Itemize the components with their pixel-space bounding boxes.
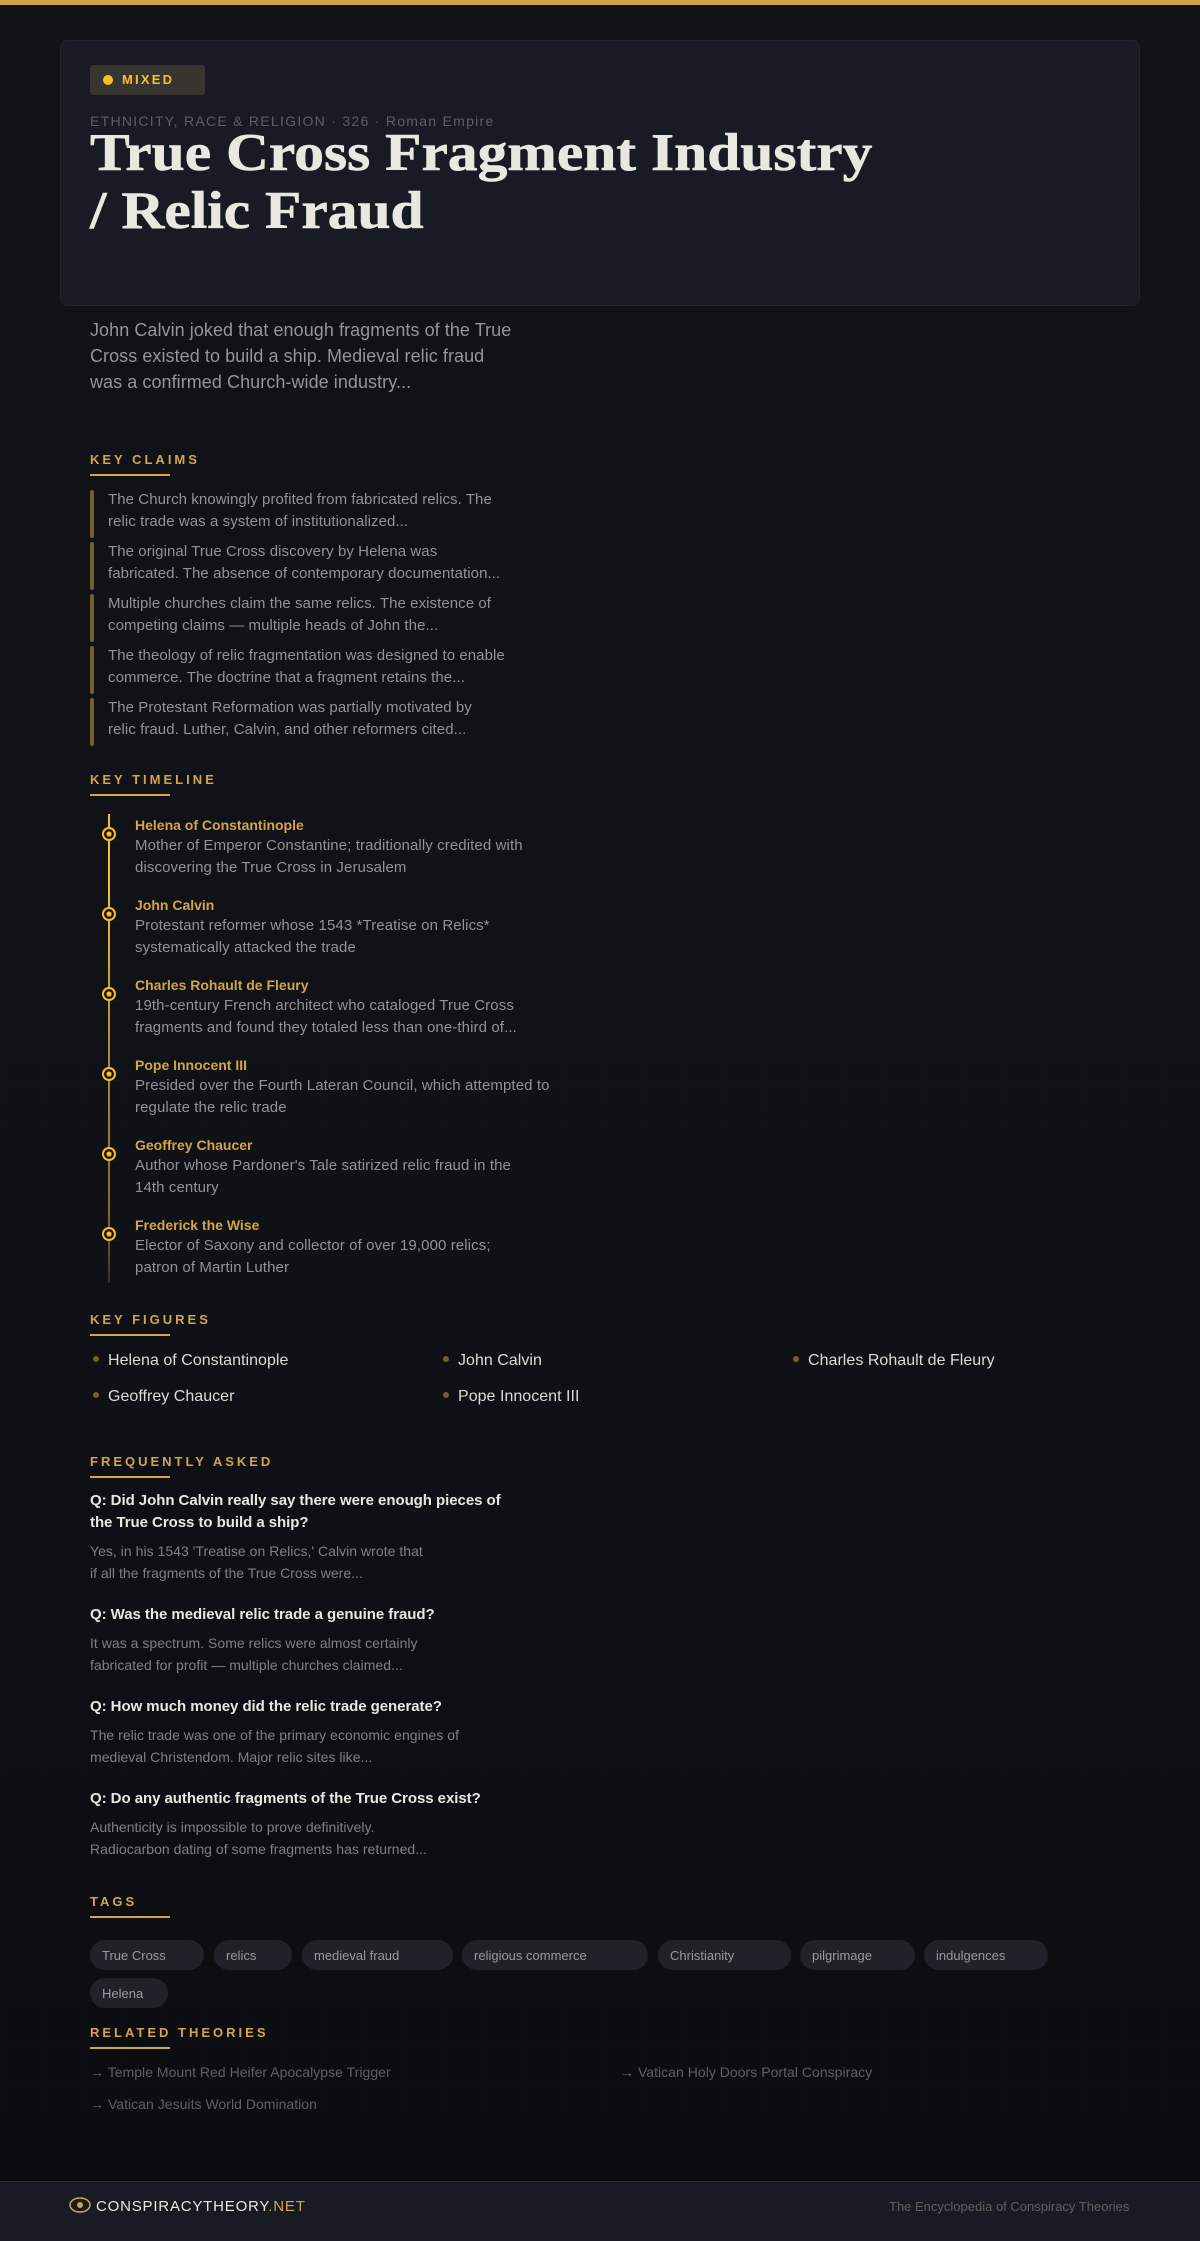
FAQ item 1: Yes, in his 1543 'Treatise on Relics,' Calvin wrote that — [90, 1543, 423, 1559]
intro paragraph: John Calvin joked that enough fragments of the True — [90, 320, 511, 340]
FAQ item 4: Authenticity is impossible to prove definitively. — [90, 1819, 374, 1835]
panel: hero header — [60, 40, 1140, 306]
related link 3: → Vatican Jesuits World Domination — [90, 2096, 317, 2112]
timeline item: Geoffrey Chaucer: Author whose Pardoner's Tale satirized relic fraud in the — [135, 1157, 511, 1174]
timeline item: Geoffrey Chaucer: 14th century — [135, 1179, 219, 1196]
tag: religious commerce — [462, 1940, 648, 1970]
timeline item: Helena of Constantinople — [102, 817, 523, 876]
FAQ item 4: Radiocarbon dating of some fragments has returned... — [90, 1841, 427, 1857]
tag: medieval fraud: medieval fraud — [314, 1948, 399, 1963]
badge: mixed verdict — [90, 65, 205, 95]
claim 1 — [90, 490, 492, 538]
claim 1: The Church knowingly profited from fabricated relics. The — [108, 491, 492, 508]
heading: key timeline: KEY TIMELINE — [90, 772, 217, 787]
icon: badge dot — [103, 75, 113, 85]
claim 3 — [90, 594, 491, 642]
FAQ item 1 — [90, 1492, 501, 1581]
timeline item: Helena of Constantinople: Helena of Constantinople — [135, 817, 304, 833]
FAQ item 2 — [90, 1606, 435, 1673]
title — [89, 124, 872, 240]
timeline item: Pope Innocent III: Presided over the Fourth Lateran Council, which attempted to — [135, 1077, 550, 1094]
icon: eye logo — [69, 2197, 91, 2213]
FAQ item 4 — [90, 1790, 481, 1857]
title: / Relic Fraud — [90, 182, 424, 240]
FAQ item 2: Q: Was the medieval relic trade a genuine fraud? — [90, 1606, 435, 1623]
timeline item: Helena of Constantinople: discovering the True Cross in Jerusalem — [135, 859, 407, 876]
panel: timeline — [102, 814, 550, 1283]
heading: related theories: RELATED THEORIES — [90, 2025, 268, 2040]
footer tagline: The Encyclopedia of Conspiracy Theories — [889, 2199, 1129, 2214]
timeline item: Frederick the Wise: Elector of Saxony and collector of over 19,000 relics; — [135, 1237, 491, 1254]
tag: Christianity: Christianity — [670, 1948, 734, 1963]
FAQ item 1: if all the fragments of the True Cross were... — [90, 1565, 363, 1581]
title: True Cross Fragment Industry — [90, 124, 872, 182]
intro paragraph: was a confirmed Church-wide industry... — [90, 372, 411, 392]
claim 5: The Protestant Reformation was partially motivated by — [108, 699, 472, 716]
tag: pilgrimage: pilgrimage — [812, 1948, 872, 1963]
badge label: MIXED — [122, 72, 174, 87]
panel: related theories — [90, 2064, 872, 2112]
tag: medieval fraud — [302, 1940, 453, 1970]
timeline item: Frederick the Wise: Frederick the Wise — [135, 1217, 259, 1233]
timeline item: Geoffrey Chaucer: Geoffrey Chaucer — [135, 1137, 252, 1153]
tag: religious commerce: religious commerce — [474, 1948, 587, 1963]
FAQ item 3 — [90, 1698, 460, 1765]
figure: Geoffrey Chaucer: Geoffrey Chaucer — [108, 1388, 234, 1405]
timeline item: Charles Rohault de Fleury — [102, 977, 517, 1036]
timeline item: John Calvin: Protestant reformer whose 1543 *Treatise on Relics* — [135, 917, 490, 934]
footer brand: CONSPIRACYTHEORY.NET — [96, 2198, 306, 2215]
FAQ item 1: the True Cross to build a ship? — [90, 1514, 308, 1531]
heading: frequently asked: FREQUENTLY ASKED — [90, 1454, 273, 1469]
tag: Helena: Helena — [102, 1986, 143, 2001]
figure: Helena of Constantinople: Helena of Constantinople — [108, 1352, 288, 1369]
panel: tags — [90, 1940, 1048, 2008]
claim 5 — [90, 698, 472, 746]
timeline item: John Calvin — [102, 897, 490, 956]
tag: indulgences — [924, 1940, 1048, 1970]
footer — [0, 2181, 1200, 2241]
heading: key claims: KEY CLAIMS — [90, 452, 200, 467]
intro paragraph: Cross existed to build a ship. Medieval relic fraud — [90, 346, 484, 366]
intro paragraph — [90, 320, 511, 392]
tag: Christianity — [658, 1940, 791, 1970]
claim 1: relic trade was a system of institutionalized... — [108, 513, 408, 530]
claim 2: The original True Cross discovery by Helena was — [108, 543, 437, 560]
related link 2: → Vatican Holy Doors Portal Conspiracy — [620, 2064, 872, 2080]
timeline item: Frederick the Wise: patron of Martin Luther — [135, 1259, 289, 1276]
panel: key figures list — [93, 1352, 995, 1405]
timeline item: Helena of Constantinople: Mother of Emperor Constantine; traditionally credited with — [135, 837, 523, 854]
panel: FAQ — [90, 1492, 501, 1857]
tag: relics — [214, 1940, 292, 1970]
FAQ item 3: medieval Christendom. Major relic sites like... — [90, 1749, 372, 1765]
claim 4 — [90, 646, 505, 694]
FAQ item 1: Q: Did John Calvin really say there were enough pieces of — [90, 1492, 501, 1509]
timeline item: Charles Rohault de Fleury: 19th-century French architect who cataloged True Cross — [135, 997, 514, 1014]
timeline item: John Calvin: John Calvin — [135, 897, 214, 913]
tag: True Cross — [90, 1940, 204, 1970]
claim 2 — [90, 542, 500, 590]
claim 3: Multiple churches claim the same relics. The existence of — [108, 595, 491, 612]
related link 1: → Temple Mount Red Heifer Apocalypse Trigger — [90, 2064, 391, 2080]
timeline item: Pope Innocent III: regulate the relic trade — [135, 1099, 287, 1116]
FAQ item 2: fabricated for profit — multiple churches claimed... — [90, 1657, 403, 1673]
FAQ item 3: The relic trade was one of the primary economic engines of — [90, 1727, 459, 1743]
timeline item: Charles Rohault de Fleury: Charles Rohault de Fleury — [135, 977, 308, 993]
heading: tags: TAGS — [90, 1894, 137, 1909]
timeline item: Charles Rohault de Fleury: fragments and found they totaled less than one-third of... — [135, 1019, 517, 1036]
heading: key figures: KEY FIGURES — [90, 1312, 211, 1327]
tag: True Cross: True Cross — [102, 1948, 166, 1963]
tag: indulgences: indulgences — [936, 1948, 1005, 1963]
timeline spine — [108, 814, 110, 1283]
claim 4: commerce. The doctrine that a fragment retains the... — [108, 669, 465, 686]
claim 3: competing claims — multiple heads of John the... — [108, 617, 438, 634]
timeline item: Frederick the Wise — [102, 1217, 491, 1276]
claim 5: relic fraud. Luther, Calvin, and other reformers cited... — [108, 721, 466, 738]
figure: John Calvin: John Calvin — [458, 1352, 542, 1369]
tag: pilgrimage — [800, 1940, 915, 1970]
FAQ item 2: It was a spectrum. Some relics were almost certainly — [90, 1635, 418, 1651]
claim 4: The theology of relic fragmentation was designed to enable — [108, 647, 505, 664]
top accent bar — [0, 0, 1200, 5]
FAQ item 4: Q: Do any authentic fragments of the True Cross exist? — [90, 1790, 481, 1807]
timeline item: Pope Innocent III: Pope Innocent III — [135, 1057, 247, 1073]
timeline item: Geoffrey Chaucer — [102, 1137, 511, 1196]
figure: Pope Innocent III: Pope Innocent III — [458, 1388, 580, 1405]
tag: Helena — [90, 1978, 168, 2008]
panel: key claims list — [90, 490, 505, 746]
category meta line: ETHNICITY, RACE & RELIGION · 326 · Roman Empire — [90, 113, 495, 129]
tag: relics: relics — [226, 1948, 256, 1963]
claim 2: fabricated. The absence of contemporary documentation... — [108, 565, 500, 582]
figure: Charles Rohault de Fleury: Charles Rohault de Fleury — [808, 1352, 995, 1369]
FAQ item 3: Q: How much money did the relic trade generate? — [90, 1698, 442, 1715]
timeline item: Pope Innocent III — [102, 1057, 550, 1116]
timeline item: John Calvin: systematically attacked the trade — [135, 939, 356, 956]
